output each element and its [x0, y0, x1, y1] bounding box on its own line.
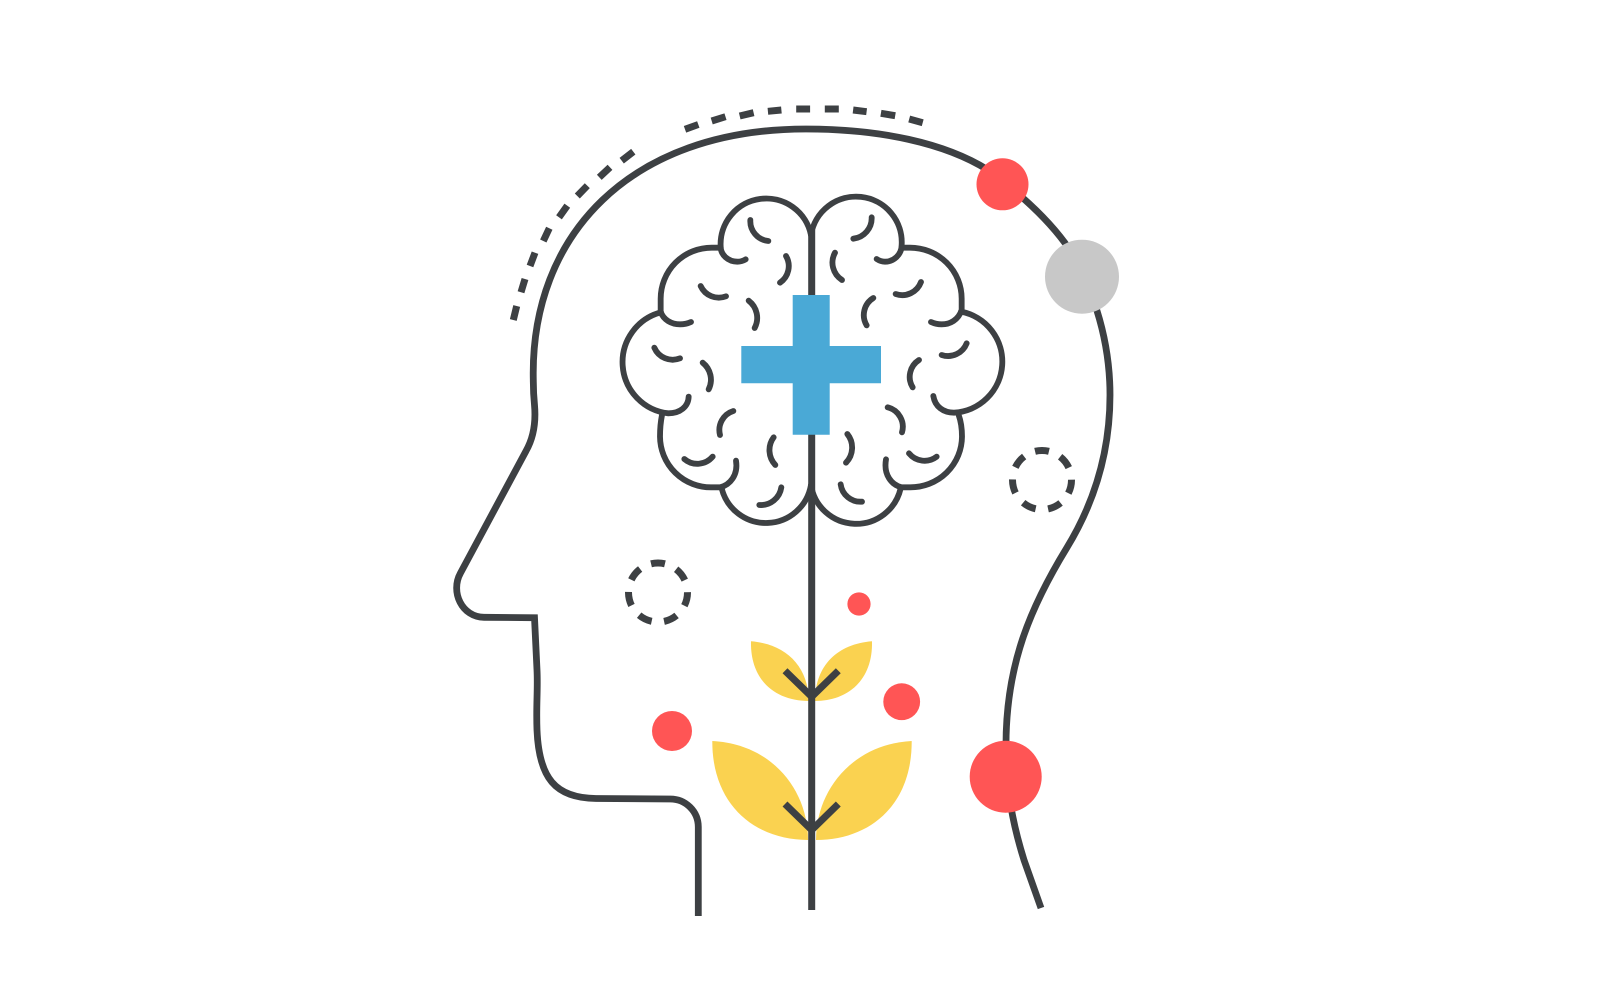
grey dot on head [1045, 240, 1119, 314]
dashed circle at back of head [1006, 444, 1078, 516]
plant stem and leaf veins [785, 230, 838, 910]
large red dot on neck [970, 741, 1042, 813]
blue medical cross [741, 295, 881, 435]
medium red dot left of plant [652, 711, 692, 751]
left hemisphere [623, 199, 811, 523]
medium red dot right of plant [883, 683, 920, 720]
brain [623, 197, 1002, 524]
red dot on crown [976, 158, 1028, 210]
small red dot [847, 592, 871, 616]
dashed circle on face [622, 557, 694, 628]
dashed arc above head [513, 109, 923, 320]
head outline [457, 129, 1110, 916]
right hemisphere [811, 197, 1002, 524]
plant leaves [712, 641, 912, 840]
